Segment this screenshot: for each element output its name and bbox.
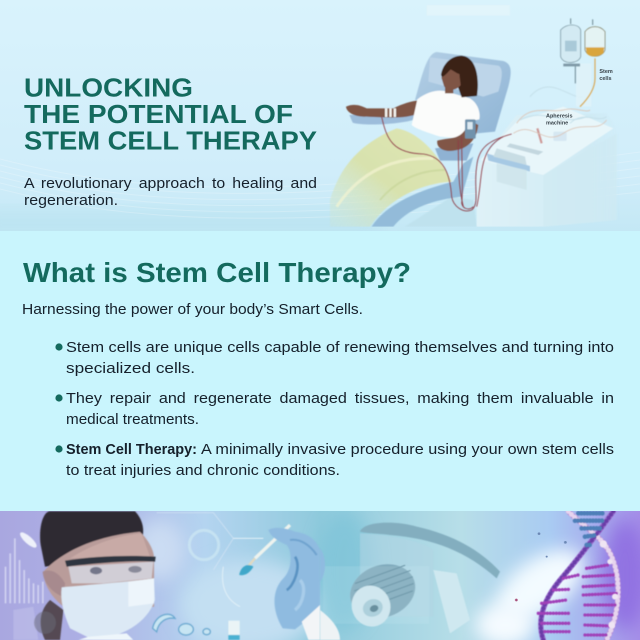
illustration: patient receiving apheresis <box>330 5 620 227</box>
bullet 3: to treat injuries and chronic conditions. <box>66 463 340 479</box>
bullet 1 <box>55 340 614 377</box>
intro sentence: Harnessing the power of your body’s Smart Cells. <box>22 302 363 318</box>
blanket <box>330 128 452 227</box>
dna helix <box>538 511 618 640</box>
label: stem cells <box>600 69 612 80</box>
goggles <box>65 556 156 567</box>
bullet 2 <box>55 391 614 428</box>
bullet 3: A minimally invasive procedure using your own stem cells <box>201 442 614 458</box>
panel: header banner <box>0 0 640 234</box>
face <box>43 532 154 613</box>
shirt <box>412 91 480 138</box>
bullet 3 <box>55 442 614 479</box>
chair back <box>415 52 511 133</box>
test tube <box>228 621 240 640</box>
subtitle <box>24 176 317 209</box>
label: stem cells: cells <box>599 76 612 82</box>
bullet 1: specialized cells. <box>66 361 195 377</box>
panel: what is stem cell therapy <box>0 231 640 511</box>
label: apheresis machine: machine <box>546 121 568 127</box>
label: apheresis machine <box>546 114 572 124</box>
bullet 2: They repair and regenerate damaged tissues, making them invaluable in <box>66 391 614 407</box>
microscope and dna right <box>320 511 618 640</box>
second arm <box>437 120 478 151</box>
arm bands <box>385 108 396 117</box>
dish bubbles <box>153 614 210 635</box>
microscope lens <box>350 564 416 627</box>
section heading: What is Stem Cell Therapy? <box>23 257 411 288</box>
apheresis machine <box>476 122 544 227</box>
iv pole <box>576 63 591 107</box>
head <box>441 56 478 97</box>
face mask <box>61 578 155 640</box>
subtitle: regeneration. <box>24 193 118 209</box>
gloved hand <box>268 528 320 629</box>
photo strip: laboratory collage <box>0 510 640 640</box>
scientist left <box>5 511 320 640</box>
bullet list <box>55 340 614 479</box>
label: stem cells: Stem <box>599 69 613 75</box>
blood tubes <box>382 117 512 211</box>
hair <box>40 511 143 567</box>
bullet 2: medical treatments. <box>66 412 199 428</box>
bullet 1: Stem cells are unique cells capable of renewing themselves and turning into <box>66 340 614 356</box>
title: THE POTENTIAL OF <box>24 101 293 129</box>
lab coat <box>302 605 320 640</box>
subtitle: A revolutionary approach to healing and <box>24 176 317 192</box>
patient arm <box>346 100 422 118</box>
pipette <box>255 525 290 558</box>
chair seat <box>405 197 477 227</box>
bullet 3: Stem Cell Therapy: <box>66 442 197 458</box>
bar chart overlay <box>5 538 44 603</box>
title <box>24 74 317 156</box>
label: apheresis machine: Apheresis <box>546 114 573 120</box>
title: UNLOCKING <box>24 74 193 102</box>
iv bags <box>561 18 605 107</box>
title: STEM CELL THERAPY <box>24 128 317 156</box>
